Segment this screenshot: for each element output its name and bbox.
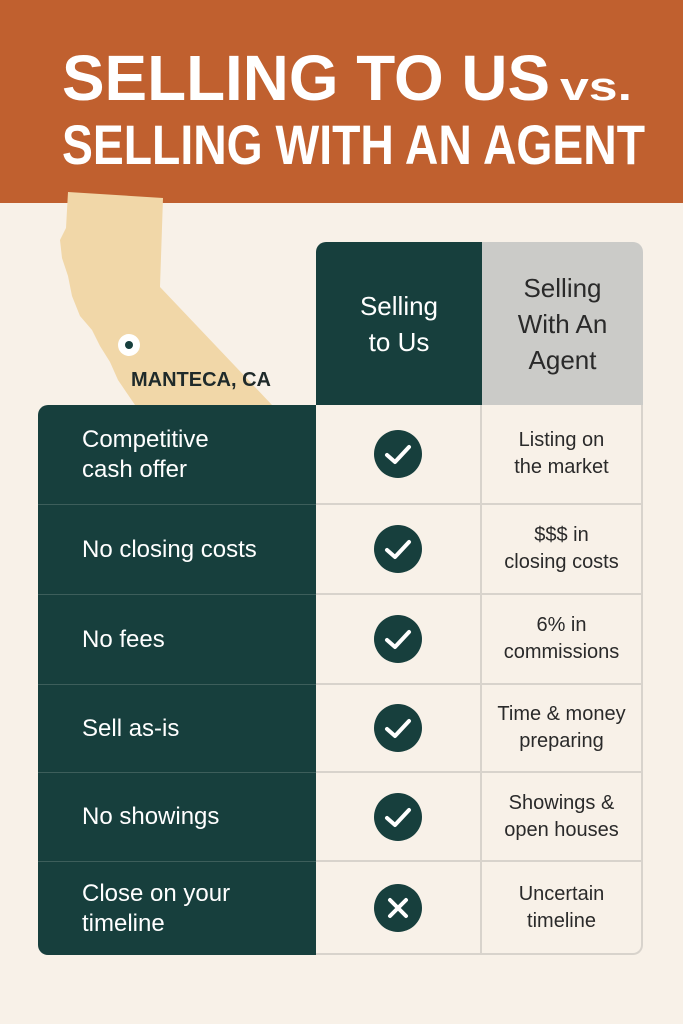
- comparison table rows: Competitive: [82, 426, 209, 452]
- comparison table rows: Listing on: [519, 429, 604, 451]
- comparison table rows: No showings: [82, 803, 219, 830]
- comparison table rows: timeline: [82, 910, 165, 936]
- column header: selling with an agent: With An: [518, 308, 607, 338]
- column header: selling with an agent: Selling: [523, 272, 602, 302]
- header banner: [0, 0, 683, 203]
- comparison table rows: commissions: [504, 641, 619, 663]
- column header: selling to us: [316, 242, 482, 405]
- comparison table rows: closing costs: [504, 551, 619, 573]
- column header: selling with an agent: [482, 242, 643, 405]
- comparison table rows: Showings &: [509, 792, 614, 814]
- title: vs.: [560, 65, 632, 109]
- column header: selling to us: to Us: [369, 326, 429, 356]
- comparison table rows: preparing: [519, 730, 604, 752]
- map: California with Manteca marker: MANTECA, CA: [131, 369, 271, 391]
- comparison table rows: Time & money: [497, 703, 626, 725]
- column header: selling to us: Selling: [360, 290, 438, 320]
- comparison table rows: open houses: [504, 818, 619, 840]
- comparison table rows: cash offer: [82, 456, 187, 482]
- comparison table rows: No fees: [82, 626, 165, 652]
- comparison table rows: No closing costs: [82, 536, 257, 562]
- comparison table rows: $$$ in: [534, 524, 589, 546]
- column header: selling with an agent: Agent: [529, 344, 596, 374]
- comparison table rows: 6% in: [536, 614, 586, 636]
- title: [62, 42, 645, 176]
- title: SELLING TO US: [62, 42, 550, 114]
- comparison table rows: Uncertain: [519, 882, 604, 904]
- comparison table rows: Sell as-is: [82, 714, 179, 742]
- comparison table rows: the market: [514, 456, 609, 478]
- map: California with Manteca marker: [60, 192, 272, 405]
- comparison table rows: timeline: [527, 910, 596, 932]
- comparison table rows: Close on your: [82, 880, 230, 906]
